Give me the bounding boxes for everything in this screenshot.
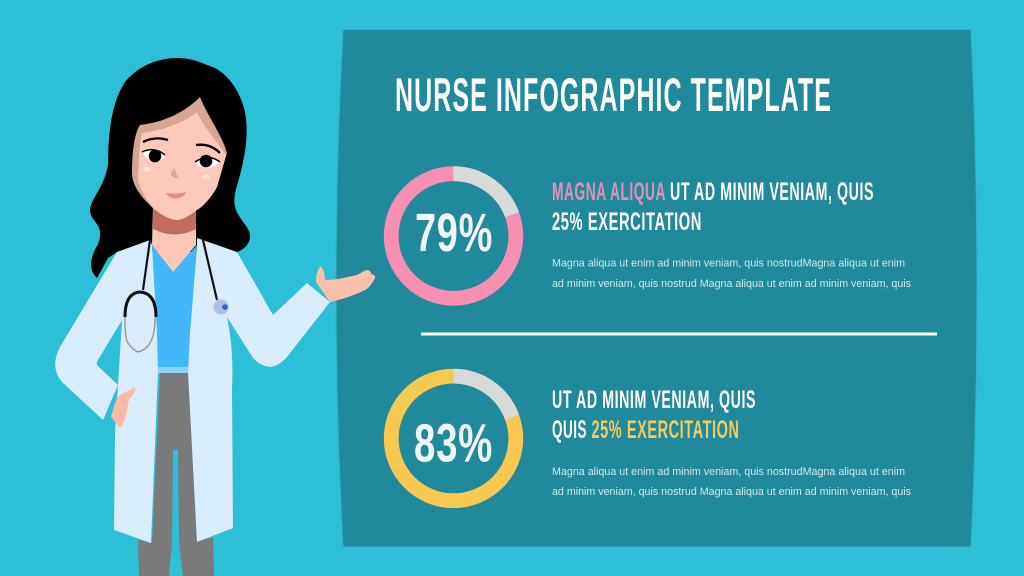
donut chart: 79%: 79%	[415, 203, 493, 263]
right hand	[316, 267, 375, 302]
hair	[90, 58, 250, 278]
mouth	[166, 192, 186, 198]
text block: first item heading: MAGNA ALIQUA	[552, 178, 666, 206]
donut chart: 83%: 83%	[414, 414, 493, 474]
neck	[152, 205, 196, 272]
text block: first item body: ad minim veniam, quis nostrud Magna aliqua ut enim ad minim veniam, quis	[552, 278, 911, 290]
text block: first item heading: 25% EXERCITATION	[552, 208, 702, 236]
text block: second item body: Magna aliqua ut enim ad minim veniam, quis nostrudMagna aliqua ut enim	[552, 466, 905, 478]
text block: first item heading	[552, 178, 874, 236]
nose	[171, 168, 179, 178]
neck shadow	[153, 208, 196, 234]
scrub top	[152, 245, 197, 372]
text block: first item heading: UT AD MINIM VENIAM, QUIS	[670, 178, 874, 206]
panel: teal content background	[336, 30, 977, 547]
stethoscope	[125, 240, 228, 352]
text block: second item heading	[552, 386, 756, 444]
trousers	[138, 373, 214, 576]
text block: second item body: ad minim veniam, quis nostrud Magna aliqua ut enim ad minim veniam, quis	[552, 486, 911, 498]
text block: first item body	[552, 258, 911, 290]
donut chart: 83%	[391, 376, 516, 501]
face highlight	[138, 112, 226, 220]
illustration: nurse character	[55, 58, 375, 576]
text block: first item body: Magna aliqua ut enim ad minim veniam, quis nostrudMagna aliqua ut enim	[552, 258, 905, 270]
cheeks	[143, 166, 210, 180]
lab coat	[55, 238, 330, 543]
left eye	[142, 138, 168, 162]
right eye	[195, 145, 220, 168]
left hand	[111, 387, 135, 428]
text block: second item heading: QUIS	[552, 416, 587, 444]
face	[132, 97, 227, 220]
text block: second item heading: 25% EXERCITATION	[592, 416, 740, 444]
text block: second item body	[552, 466, 911, 498]
donut chart: 79%	[391, 174, 516, 298]
text block: second item heading: UT AD MINIM VENIAM, QUIS	[552, 386, 756, 414]
scrub hem	[158, 367, 188, 373]
